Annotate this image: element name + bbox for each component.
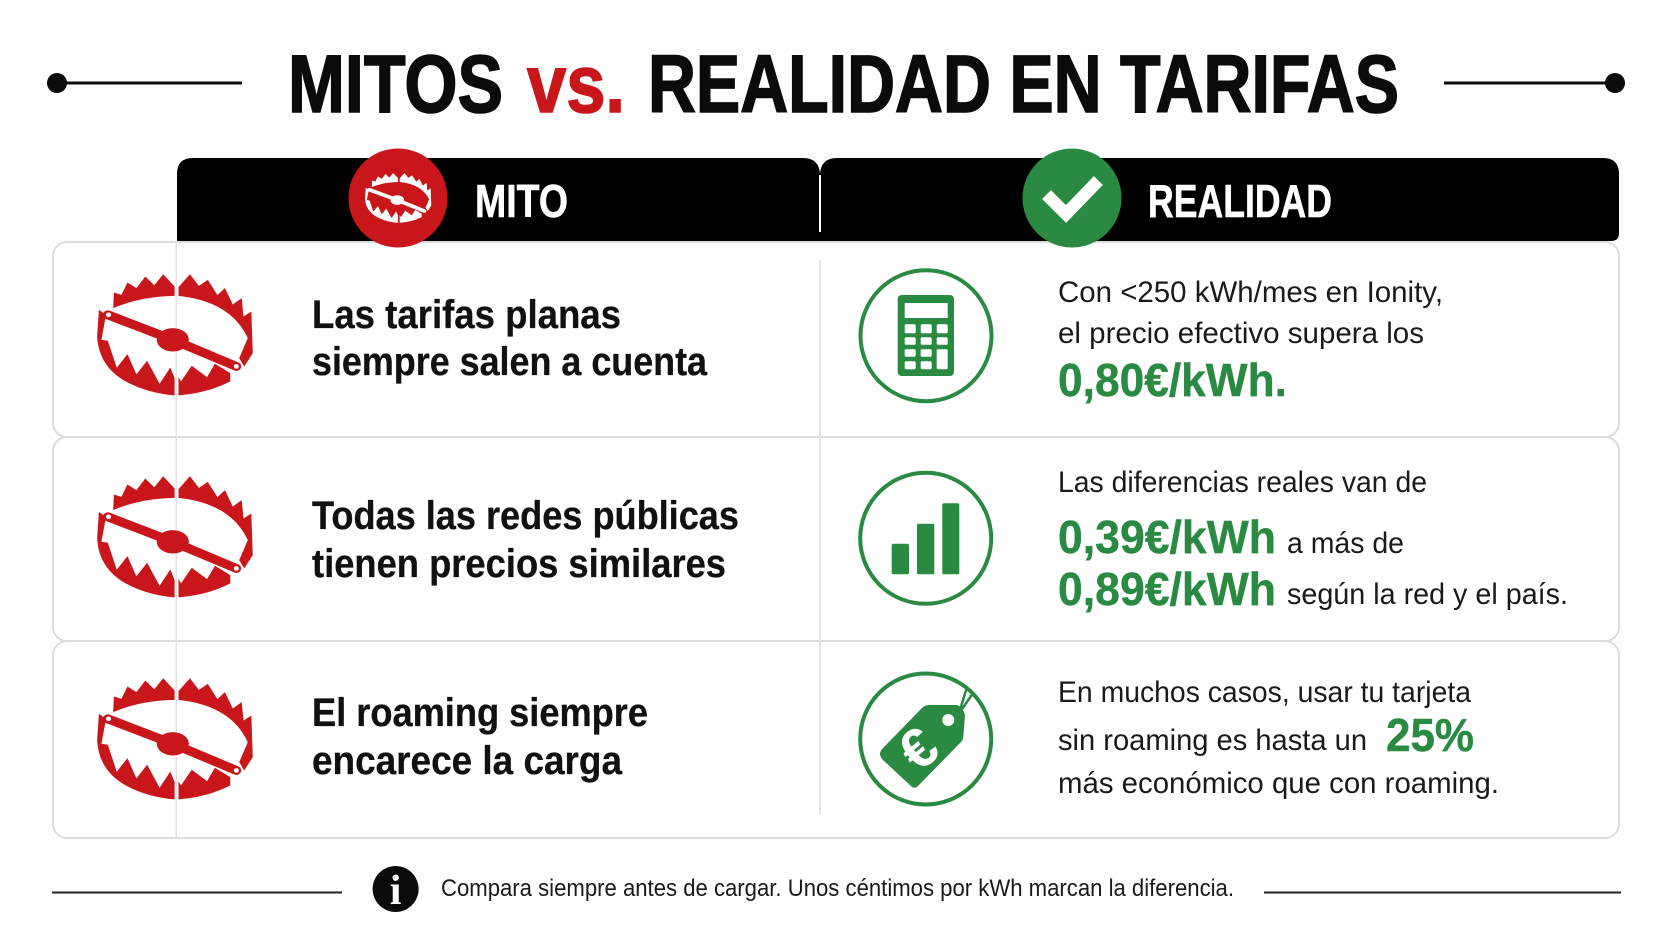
myth text row 2: tienen precios similares — [312, 542, 726, 586]
reality text row 2: 0,89€/kWh — [1058, 563, 1276, 615]
myth text row 1: Las tarifas planas — [312, 293, 621, 337]
icon: price tag — [860, 674, 991, 804]
myth text row 2: Todas las redes públicas — [312, 494, 739, 538]
reality text row 2: 0,39€/kWh — [1058, 511, 1276, 563]
myth text row 3: El roaming siempre — [312, 691, 648, 735]
reality text row 3: más económico que con roaming. — [1058, 767, 1499, 800]
title: vs. — [527, 39, 625, 130]
reality text row 1 — [1058, 276, 1443, 406]
icon: realidad check badge — [1022, 148, 1122, 248]
title ornament right — [1444, 73, 1625, 93]
reality text row 2 — [1058, 466, 1568, 615]
reality text row 2: Las diferencias reales van de — [1058, 466, 1427, 499]
reality text row 1: 0,80€/kWh. — [1058, 354, 1287, 406]
reality text row 2: según la red y el país. — [1287, 578, 1568, 611]
icon: bar chart — [860, 473, 991, 604]
icon: trap row 2 — [97, 476, 253, 597]
header bar: realidad — [820, 158, 1619, 241]
icon: info: i — [390, 868, 402, 914]
title ornament left — [47, 73, 242, 93]
heading: realidad: REALIDAD — [1148, 175, 1332, 227]
footer rule right — [1264, 892, 1621, 894]
myth text row 3 — [312, 691, 648, 783]
row 1 panel — [53, 242, 1619, 437]
title — [288, 39, 1399, 130]
icon: info — [373, 866, 419, 914]
icon: trap row 1 — [97, 274, 253, 395]
row 3 panel — [53, 641, 1619, 838]
reality text row 3: 25% — [1386, 709, 1474, 761]
row 2 panel — [53, 437, 1619, 641]
reality text row 3: En muchos casos, usar tu tarjeta — [1058, 676, 1471, 709]
icon: trap row 3 — [97, 678, 253, 799]
reality text row 1: el precio efectivo supera los — [1058, 317, 1424, 350]
myth text row 3: encarece la carga — [312, 739, 623, 783]
title: REALIDAD EN TARIFAS — [648, 39, 1399, 130]
title: MITOS — [288, 39, 503, 130]
icon: calculator — [860, 270, 992, 401]
comparison rows — [53, 242, 1619, 838]
myth text row 1: siempre salen a cuenta — [312, 340, 708, 384]
myth text row 1 — [312, 293, 708, 384]
icon: mito badge — [348, 148, 448, 248]
footer note: Compara siempre antes de cargar. Unos céntimos por kWh marcan la diferencia. — [441, 875, 1234, 902]
reality text row 2: a más de — [1287, 527, 1404, 560]
reality text row 3 — [1058, 676, 1499, 800]
icon: price tag: € — [886, 714, 950, 783]
reality text row 3: sin roaming es hasta un — [1058, 724, 1367, 757]
myth text row 2 — [312, 494, 739, 586]
heading: mito: MITO — [475, 175, 568, 227]
footer rule left — [52, 892, 342, 894]
reality text row 1: Con <250 kWh/mes en Ionity, — [1058, 276, 1443, 309]
header bar: mito — [177, 158, 820, 241]
